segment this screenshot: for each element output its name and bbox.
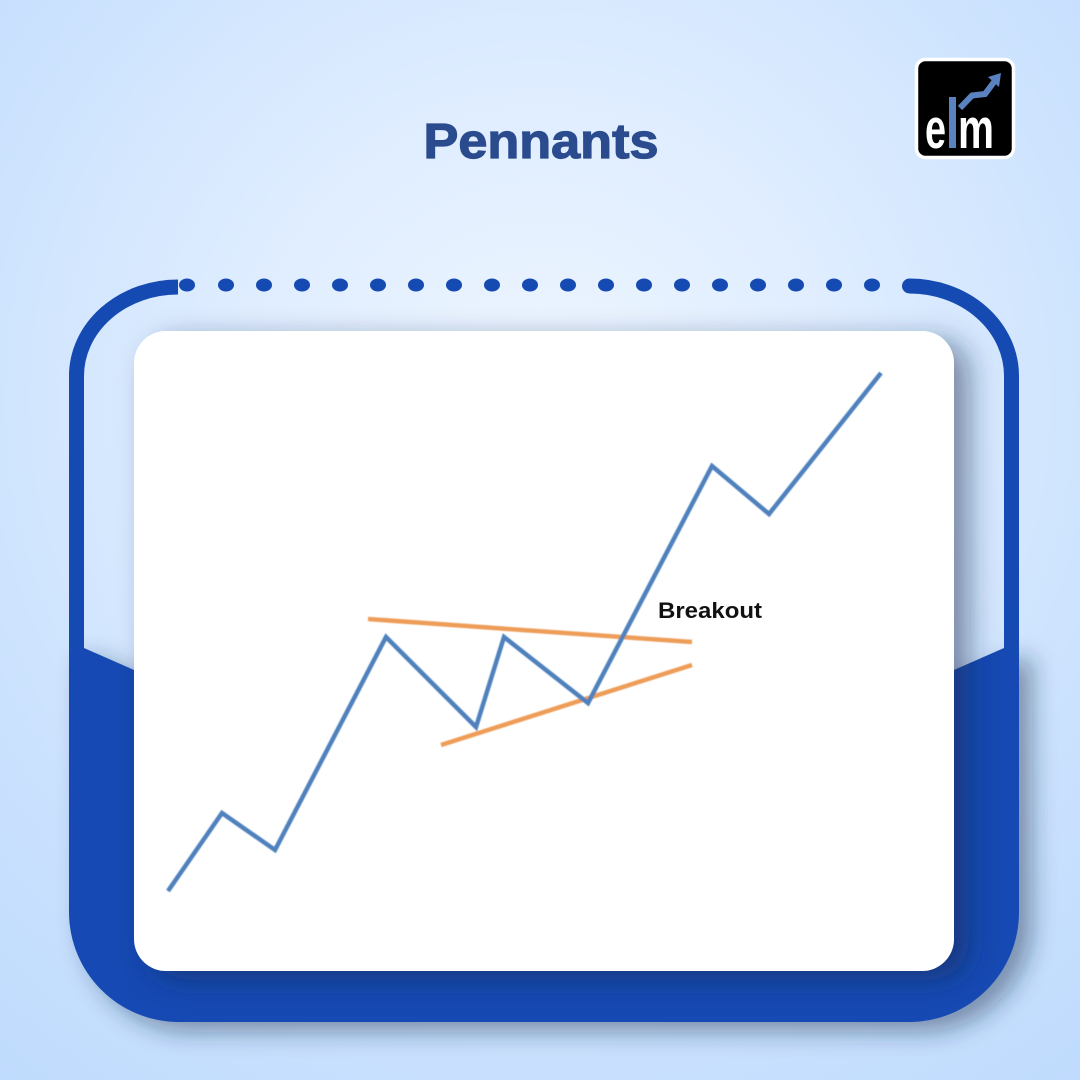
frame: lower solid blue panel xyxy=(69,648,1019,1022)
upper orange trend line xyxy=(368,619,692,642)
panel: white chart card xyxy=(134,331,954,971)
label: breakout: Breakout xyxy=(658,598,763,623)
frame: left corner stroke xyxy=(76,287,178,650)
icon: elm logo: m xyxy=(958,97,994,161)
title: Pennants xyxy=(424,115,658,169)
frame: dotted top edge xyxy=(179,278,880,292)
icon: elm logo xyxy=(916,60,1014,161)
blue price line xyxy=(168,373,881,891)
icon: elm logo: e xyxy=(925,97,946,161)
frame: right corner stroke xyxy=(910,286,1012,650)
lower orange trend line xyxy=(441,665,692,745)
chart: pennant pattern xyxy=(168,373,881,891)
